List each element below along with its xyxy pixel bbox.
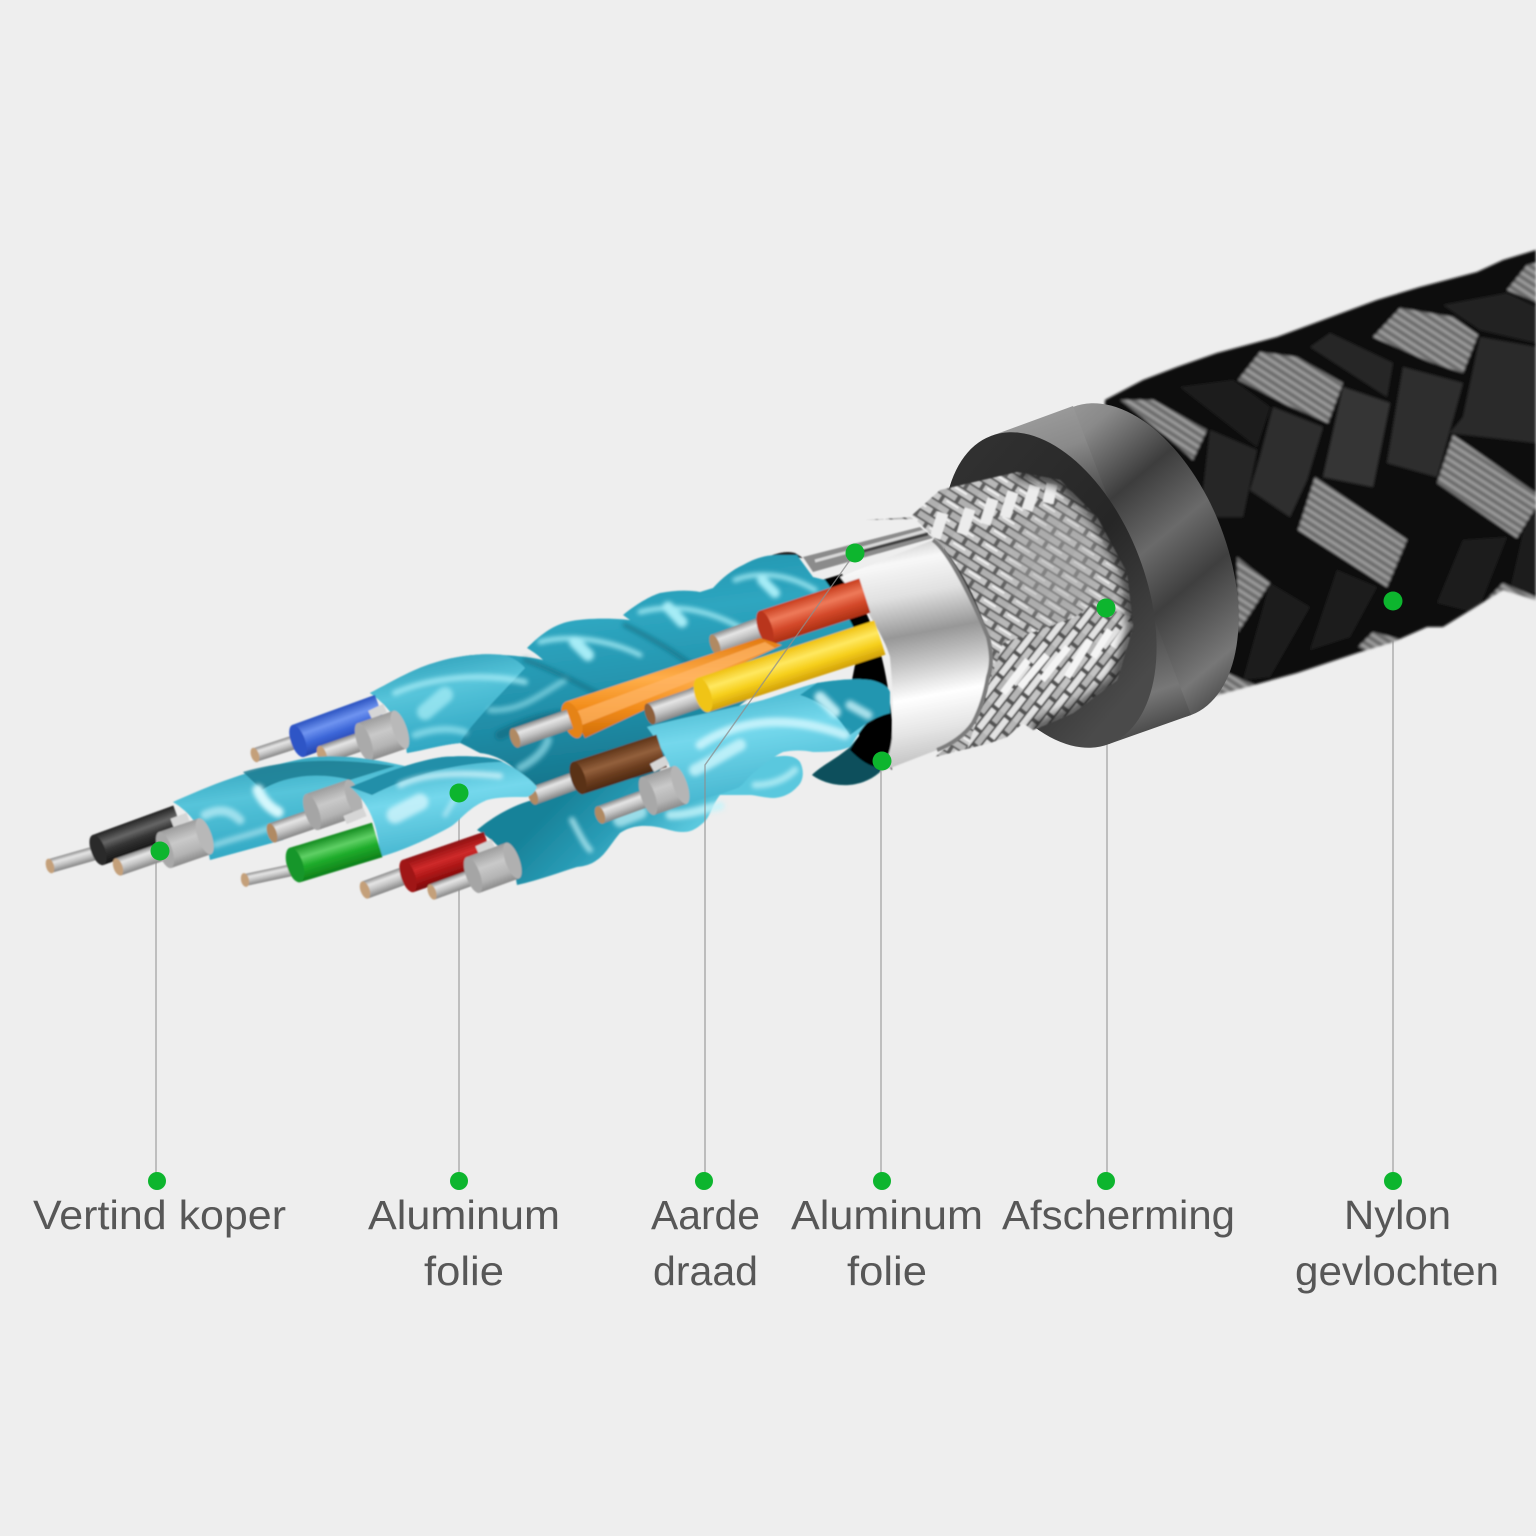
rope shadows: [500, 625, 700, 735]
leader lines: [156, 601, 1393, 1181]
callout dots on the cable: [150, 544, 1402, 860]
label: Afscherming: Afscherming: [1002, 1192, 1235, 1238]
red wire: [358, 832, 495, 900]
black cavity shadow: [850, 712, 892, 768]
inner aluminium foil cylinder: [840, 540, 991, 772]
coral wire: [707, 578, 870, 657]
metal braid shield: [870, 471, 1134, 758]
lower pair foil: red pair: [477, 756, 803, 885]
grey conductor, blue pair: [315, 708, 413, 765]
label: Aluminum folie (outer foil): folie: [847, 1248, 927, 1294]
black wire: [44, 806, 188, 874]
nylon braided jacket: [1102, 248, 1536, 698]
label: Aluminum folie (wire foil): folie: [424, 1248, 504, 1294]
foil highlights: [395, 575, 815, 768]
left pair foil: [173, 756, 405, 860]
label: Nylon gevlochten: [1295, 1192, 1499, 1294]
label: Aluminum folie (outer foil): Aluminum: [791, 1192, 983, 1238]
woven dark strands: [1180, 293, 1536, 680]
label: Aarde draad: Aarde: [651, 1192, 760, 1238]
ring outer band: [984, 373, 1280, 749]
callout dots above the labels: [148, 1172, 1402, 1190]
label: Aarde draad: [651, 1192, 760, 1294]
blue wire: [249, 695, 387, 763]
grey conductor, red pair: [426, 840, 526, 901]
middle pair foil: [345, 756, 537, 857]
yellow wire: [642, 620, 885, 726]
grey conductor, black pair: [111, 816, 218, 877]
dark foil cavity: [812, 710, 891, 785]
grey weave patches: [1120, 263, 1536, 698]
grey conductor, brown pair: [593, 764, 693, 825]
label: Aluminum folie (wire foil): [368, 1192, 560, 1294]
label: Nylon gevlochten: gevlochten: [1295, 1248, 1499, 1294]
label: Nylon gevlochten: Nylon: [1344, 1192, 1451, 1238]
label: Aarde draad: draad: [653, 1248, 758, 1294]
upper twisted pair foil: [370, 555, 860, 812]
ring front face: [902, 402, 1198, 778]
bright strands on the top arc: [935, 484, 1052, 538]
black ferrule ring: [902, 373, 1280, 778]
leader line: ground wire: [705, 553, 855, 1181]
lower pair foil: brown pair: [647, 679, 890, 803]
label: Vertind koper: Vertind koper: [33, 1192, 286, 1238]
label: Aluminum folie (outer foil): [791, 1192, 983, 1294]
conductors and foil bundle: [44, 527, 991, 901]
label: Aluminum folie (wire foil): Aluminum: [368, 1192, 560, 1238]
green wire: [240, 823, 383, 888]
ground wire strand: [770, 527, 933, 572]
grey conductor, green pair: [264, 777, 366, 844]
brown wire: [526, 735, 667, 806]
bright strands in the lower herringbone: [1003, 623, 1130, 693]
dark cable interior: [822, 574, 892, 770]
orange wire: [507, 638, 782, 749]
